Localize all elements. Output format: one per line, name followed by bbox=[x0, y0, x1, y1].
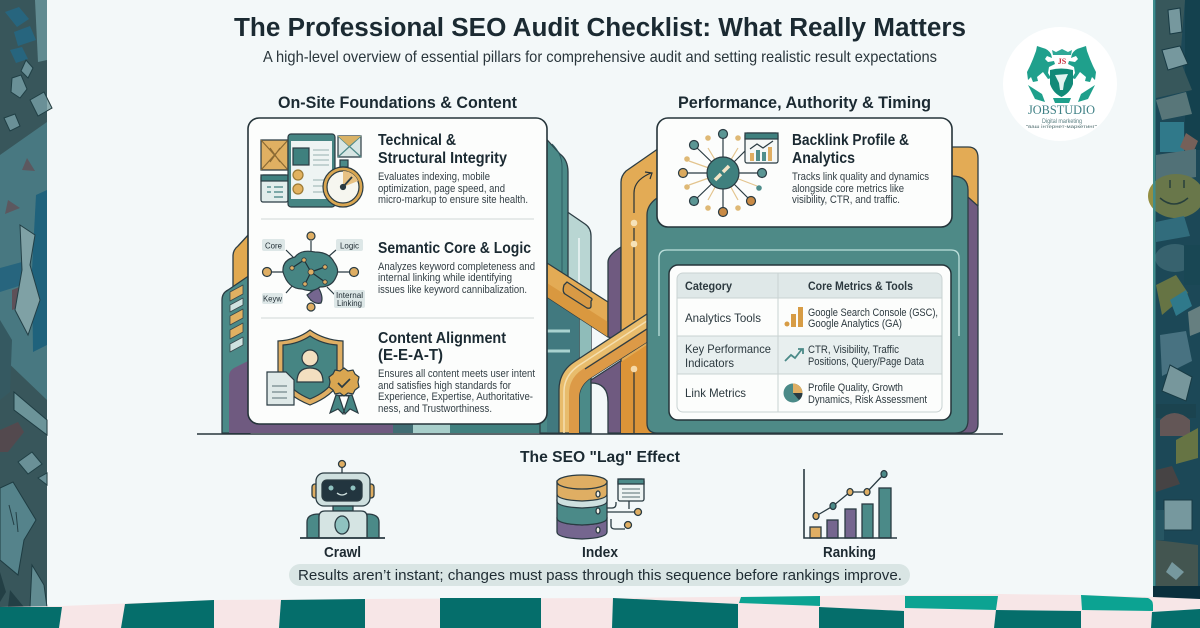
table row: link metrics: Link Metrics bbox=[685, 386, 746, 400]
text: content heading: Content Alignment bbox=[378, 330, 507, 347]
brain labels: Logic bbox=[340, 240, 360, 250]
table row: key performance indicators: Key Performance bbox=[685, 342, 771, 356]
right teal panel bbox=[647, 176, 968, 433]
text: content heading bbox=[378, 330, 507, 364]
table row: link metrics: Dynamics, Risk Assessment bbox=[808, 394, 927, 406]
table row: link metrics: Profile Quality, Growth bbox=[808, 382, 903, 394]
text: backlink description: alongside core metrics like bbox=[792, 183, 904, 195]
pale panel outline bbox=[659, 250, 959, 336]
right purple back bbox=[950, 195, 978, 433]
text: semantic description: Analyzes keyword completeness and bbox=[378, 261, 535, 273]
table row: key performance indicators: Indicators bbox=[685, 356, 734, 370]
text: technical heading bbox=[378, 132, 507, 167]
logo: JS bbox=[1058, 57, 1067, 66]
purple pillar upper bbox=[608, 247, 621, 340]
table row: link metrics bbox=[685, 382, 927, 406]
subtitle: A high-level overview of essential pillars for comprehensive audit and setting realistic result expectations bbox=[263, 49, 937, 66]
brain labels: Keyw bbox=[263, 294, 283, 304]
brain labels: Internal bbox=[336, 291, 363, 300]
icon: database bbox=[557, 475, 644, 539]
text: semantic description bbox=[378, 261, 535, 296]
label: crawl: Crawl bbox=[324, 544, 361, 561]
gold riser bbox=[621, 146, 662, 433]
logo: left horse bbox=[1027, 46, 1055, 82]
text: semantic description: internal linking while identifying bbox=[378, 272, 512, 284]
gold curved band bbox=[559, 312, 650, 433]
logo: "ваш інтернет-маркетинг" bbox=[1026, 124, 1098, 129]
icon: shield with badge bbox=[267, 330, 359, 414]
brain labels bbox=[262, 239, 365, 308]
text: backlink heading: Analytics bbox=[792, 150, 855, 167]
text: backlink description: visibility, CTR, and traffic. bbox=[792, 194, 900, 206]
icon: robot bbox=[300, 460, 385, 538]
left doodle strip bbox=[0, 0, 52, 607]
text: content description: Experience, Expertise, Authoritative- bbox=[378, 391, 533, 403]
label: ranking: Ranking bbox=[823, 544, 876, 561]
table row: key performance indicators: Positions, Query/Page Data bbox=[808, 356, 925, 368]
section heading: performance: Performance, Authority & Timing bbox=[678, 93, 931, 112]
callout: results note: Results aren’t instant; changes must pass through this sequence before rankings improve. bbox=[298, 567, 902, 584]
logo: JOBSTUDIO bbox=[1028, 102, 1095, 117]
text: technical heading: Technical & bbox=[378, 132, 456, 149]
label: index: Index bbox=[582, 544, 619, 561]
teal under curve bbox=[579, 375, 591, 433]
brain labels: Linking bbox=[337, 299, 362, 308]
right doodle strip bbox=[1148, 0, 1200, 600]
table row: key performance indicators: CTR, Visibility, Traffic bbox=[808, 344, 899, 356]
table row: analytics tools: Google Analytics (GA) bbox=[808, 318, 902, 330]
text: content description: ness, and Trustworthiness. bbox=[378, 403, 492, 415]
panel: on-site card bbox=[248, 118, 547, 424]
logo: right horse bbox=[1068, 46, 1096, 82]
under-card base bbox=[248, 420, 393, 433]
centre pale panel bbox=[566, 211, 591, 433]
title: The Professional SEO Audit Checklist: What Really Matters bbox=[234, 14, 966, 42]
table header: Core Metrics & Tools bbox=[808, 279, 913, 293]
table row: analytics tools: Google Search Console (GSC), bbox=[808, 307, 938, 319]
table bbox=[677, 273, 942, 412]
table row: key performance indicators bbox=[685, 342, 925, 370]
text: semantic description: issues like keyword cannibalization. bbox=[378, 284, 527, 296]
text: backlink heading: Backlink Profile & bbox=[792, 132, 909, 149]
right gold back bbox=[945, 147, 978, 206]
architecture illustration behind cards bbox=[222, 132, 978, 433]
left teal tower bbox=[222, 275, 250, 433]
logo: Digital marketing bbox=[1042, 119, 1082, 125]
text: technical description: Evaluates indexing, mobile bbox=[378, 171, 490, 183]
text: content heading: (E-E-A-T) bbox=[378, 347, 443, 364]
text: technical description: micro-markup to ensure site health. bbox=[378, 194, 528, 206]
table header bbox=[685, 279, 913, 293]
logo bbox=[1003, 27, 1117, 141]
icon: tablet and stopwatch bbox=[261, 134, 363, 207]
text: technical description bbox=[378, 171, 528, 206]
text: technical heading: Structural Integrity bbox=[378, 150, 507, 167]
icon: brain network bbox=[262, 232, 358, 311]
text: content description: and satisfies high standards for bbox=[378, 380, 511, 392]
icon: ranking chart bbox=[804, 469, 897, 538]
purple arch lower bbox=[591, 358, 625, 433]
base line bbox=[197, 433, 1003, 435]
gold crossing band bbox=[547, 263, 608, 337]
text: backlink heading bbox=[792, 132, 909, 167]
table row: analytics tools bbox=[685, 307, 938, 330]
heading: SEO lag effect: The SEO "Lag" Effect bbox=[520, 449, 681, 466]
icon: backlink hub bbox=[678, 130, 778, 216]
arrow on gold riser bbox=[631, 172, 652, 433]
left gold tab bbox=[233, 233, 250, 300]
brain labels: Core bbox=[265, 240, 282, 250]
panel: backlink card bbox=[657, 118, 952, 227]
bottom checker band bbox=[0, 594, 1200, 628]
panel: metrics table card bbox=[669, 265, 951, 420]
table row: analytics tools: Analytics Tools bbox=[685, 311, 761, 325]
text: backlink description: Tracks link quality and dynamics bbox=[792, 171, 929, 183]
text: technical description: optimization, page speed, and bbox=[378, 183, 505, 195]
centre teal column bbox=[540, 132, 579, 433]
table header: Category bbox=[685, 279, 732, 293]
logo: shield and crest bbox=[1028, 49, 1095, 103]
text: semantic heading: Semantic Core & Logic bbox=[378, 240, 531, 257]
text: backlink description bbox=[792, 171, 929, 206]
section heading: on-site: On-Site Foundations & Content bbox=[278, 93, 517, 112]
text: content description bbox=[378, 368, 535, 415]
text: content description: Ensures all content meets user intent bbox=[378, 368, 535, 380]
